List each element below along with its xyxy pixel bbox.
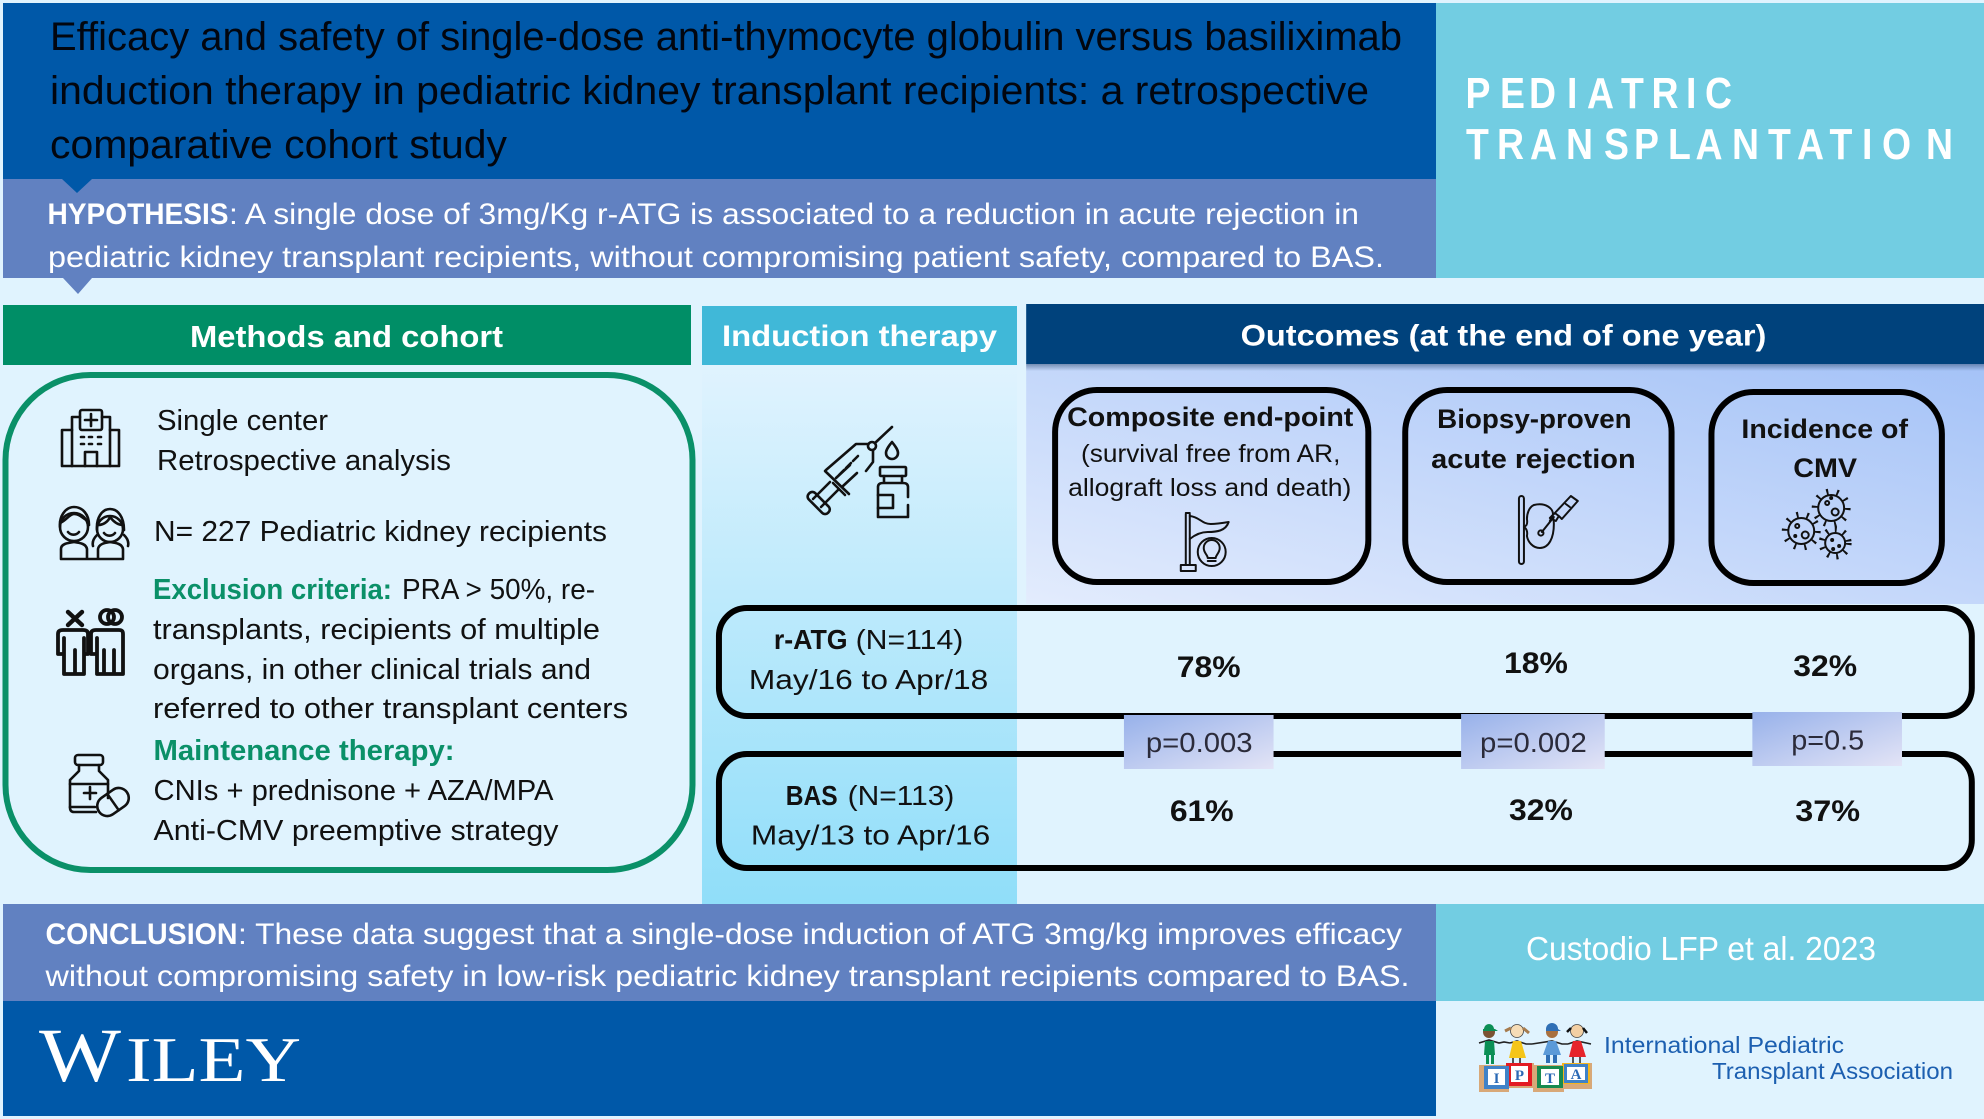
icon: letter blocks	[1479, 1063, 1592, 1092]
text: association name: Transplant Association	[1712, 1058, 1953, 1084]
text: exclusion criteria	[153, 574, 628, 725]
panel: title banner	[3, 3, 1436, 179]
panel: hypothesis: : A single dose of 3mg/Kg r-ATG is associated to a reduction in acute rejection in	[229, 198, 1359, 231]
p-value: rejection: p=0.002	[1480, 727, 1587, 758]
text: exclusion criteria: referred to other transplant centers	[153, 693, 628, 725]
row: BAS results: 32%	[1509, 794, 1573, 827]
heading: outcomes	[1026, 304, 1984, 364]
heading: induction therapy	[702, 306, 1017, 365]
p-value: composite	[1124, 715, 1274, 769]
box: biopsy-proven acute rejection: Biopsy-proven	[1437, 404, 1632, 434]
panel: hypothesis	[3, 179, 1436, 294]
title: Efficacy and safety of single-dose anti-thymocyte globulin versus basiliximab	[50, 15, 1402, 59]
box: incidence of CMV	[1711, 392, 1942, 583]
panel: induction therapy	[702, 306, 1017, 904]
panel: conclusion	[3, 904, 1436, 1001]
box: composite end-point: allograft loss and death)	[1068, 474, 1351, 502]
panel: conclusion: CONCLUSION	[46, 918, 238, 951]
row: r-ATG results: 32%	[1793, 650, 1857, 683]
text: maintenance therapy: Anti-CMV preemptive strategy	[154, 815, 559, 847]
row: BAS results: May/13 to Apr/16	[751, 819, 990, 851]
p-value: rejection	[1461, 714, 1605, 769]
panel: Wiley footer	[3, 1001, 1436, 1116]
text: cohort size: N= 227 Pediatric kidney recipients	[154, 516, 607, 548]
icon: letter blocks: P	[1515, 1068, 1524, 1084]
panel: citation: Custodio LFP et al. 2023	[1526, 930, 1876, 967]
panel: journal name: TRANSPLANTATION	[1466, 119, 1953, 169]
box: biopsy-proven acute rejection: acute rejection	[1431, 444, 1636, 474]
box: incidence of CMV: Incidence of	[1741, 414, 1909, 444]
row: r-ATG results: 78%	[1177, 651, 1241, 684]
row: BAS results	[719, 754, 1972, 868]
row: BAS results: 37%	[1795, 795, 1860, 828]
text: exclusion criteria: organs, in other clinical trials and	[153, 654, 591, 686]
text: maintenance therapy: CNIs + prednisone + AZA/MPA	[154, 775, 554, 807]
icon: children on blocks	[1479, 1023, 1591, 1064]
panel: hypothesis: HYPOTHESIS	[48, 198, 228, 231]
box: composite end-point: (survival free from AR,	[1081, 440, 1340, 468]
icon: medicine bottle and capsule	[70, 755, 133, 820]
heading: outcomes: Outcomes (at the end of one year)	[1241, 319, 1766, 353]
title	[50, 15, 1402, 167]
text: exclusion criteria: PRA > 50%, re-	[402, 574, 595, 606]
icon: letter blocks: I	[1494, 1071, 1500, 1087]
title: induction therapy in pediatric kidney transplant recipients: a retrospective	[50, 69, 1369, 113]
icon: syringe and vial	[806, 427, 908, 517]
panel: Wiley footer: W	[39, 1014, 121, 1098]
heading: methods and cohort: Methods and cohort	[190, 319, 503, 354]
icon: flag with lightbulb	[1181, 513, 1229, 571]
panel: conclusion: without compromising safety in low-risk pediatric kidney transplant recipients compared to BAS.	[44, 960, 1410, 993]
icon: letter blocks: A	[1571, 1067, 1582, 1083]
text: maintenance therapy: Maintenance therapy:	[154, 735, 455, 767]
p-value: composite: p=0.003	[1146, 727, 1253, 758]
text: association name: International Pediatric	[1604, 1032, 1844, 1058]
panel: conclusion: : These data suggest that a single-dose induction of ATG 3mg/kg improves efficacy	[238, 918, 1402, 951]
icon: hospital	[62, 410, 119, 466]
panel: journal name: PEDIATRIC	[1465, 68, 1732, 118]
box: composite end-point	[1055, 390, 1368, 582]
icon: kidney biopsy	[1519, 496, 1578, 564]
text: maintenance therapy	[154, 735, 559, 847]
panel: hypothesis: pediatric kidney transplant recipients, without compromising patient safety, compared to BAS.	[48, 241, 1384, 274]
row: r-ATG results: 18%	[1504, 647, 1568, 680]
box: biopsy-proven acute rejection	[1405, 390, 1672, 582]
text: exclusion criteria: Exclusion criteria:	[153, 574, 392, 606]
heading: induction therapy: Induction therapy	[722, 320, 997, 353]
row: r-ATG results	[719, 608, 1972, 716]
box: incidence of CMV: CMV	[1793, 453, 1857, 483]
box: composite end-point: Composite end-point	[1067, 402, 1353, 432]
row: BAS results: (N=113)	[848, 780, 954, 811]
row: r-ATG results: May/16 to Apr/18	[749, 664, 988, 695]
p-value: CMV: p=0.5	[1791, 724, 1864, 756]
p-value: CMV	[1752, 712, 1902, 766]
row: r-ATG results: r-ATG	[774, 624, 848, 655]
icon: children	[60, 507, 128, 559]
text: study design: Retrospective analysis	[157, 445, 451, 477]
text: study design	[157, 405, 451, 477]
icon: excluded figures	[58, 610, 123, 674]
heading: methods and cohort	[3, 305, 691, 365]
row: BAS results: BAS	[786, 780, 838, 811]
panel: citation	[1436, 904, 1984, 1001]
panel: Wiley footer: ILEY	[126, 1024, 301, 1095]
icon: letter blocks: T	[1545, 1071, 1555, 1087]
text: exclusion criteria: transplants, recipients of multiple	[153, 614, 600, 646]
text: association name	[1604, 1032, 1953, 1084]
row: BAS results: 61%	[1170, 795, 1234, 828]
row: r-ATG results: (N=114)	[856, 624, 963, 655]
panel: methods and cohort	[3, 305, 692, 870]
text: study design: Single center	[157, 405, 328, 437]
title: comparative cohort study	[50, 123, 507, 167]
panel: journal name	[1436, 3, 1984, 278]
panel: outcomes	[1026, 304, 1984, 604]
icon: viruses	[1785, 492, 1849, 556]
logo: IPTA	[1479, 1023, 1953, 1092]
